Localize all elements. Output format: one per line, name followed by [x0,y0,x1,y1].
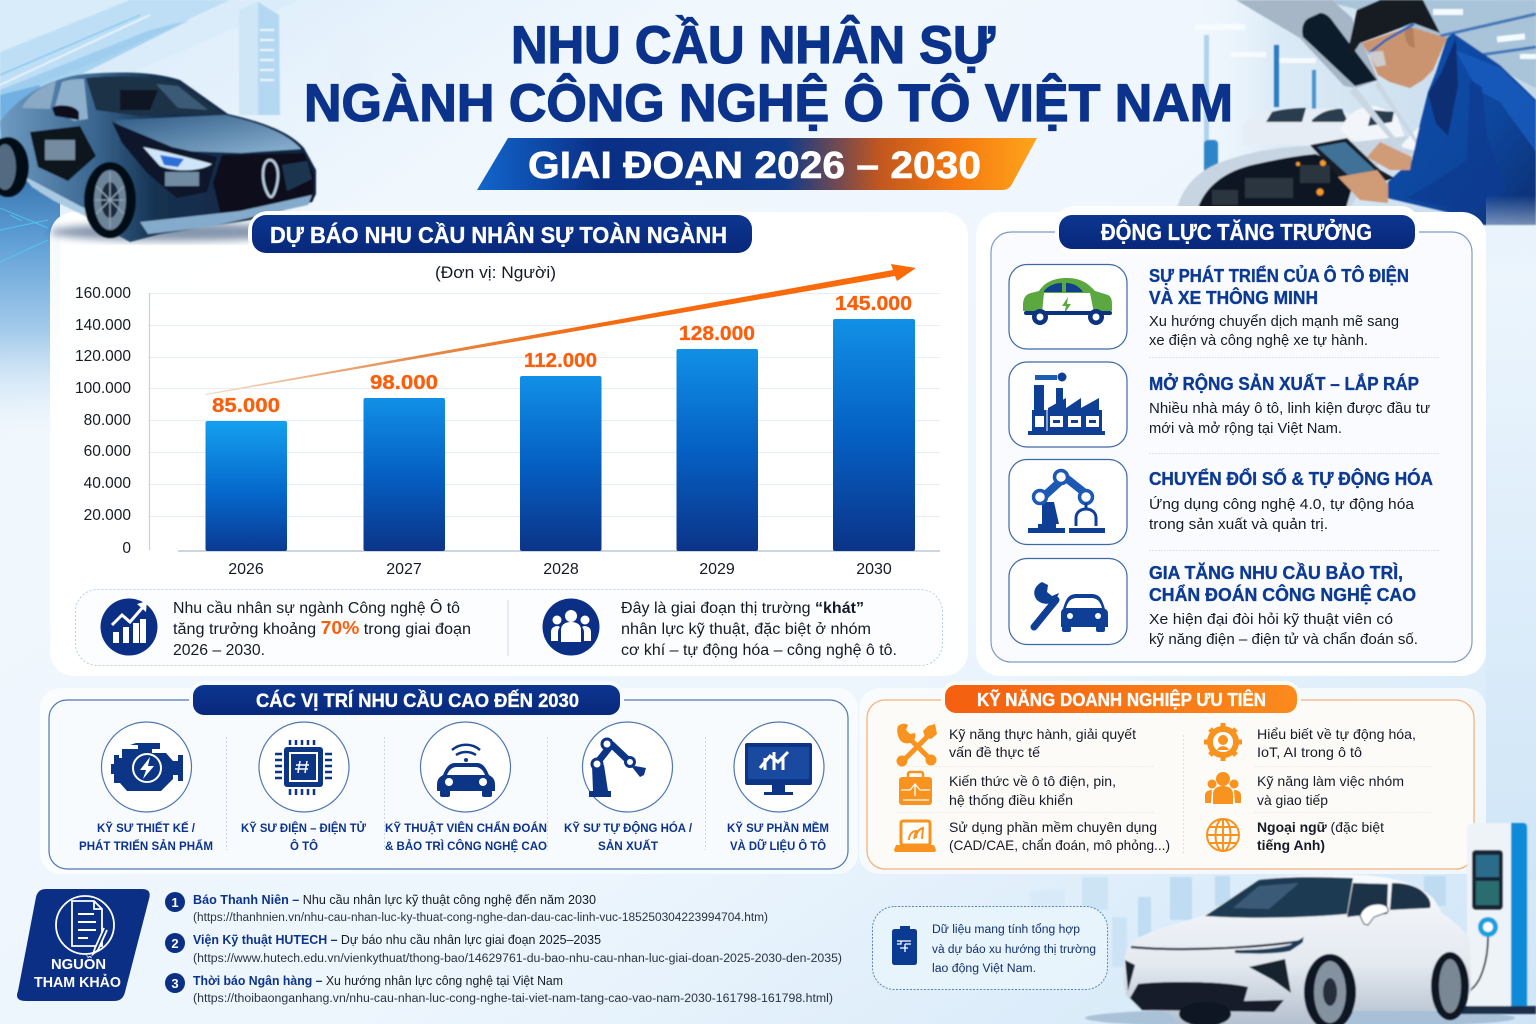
driver 1 text: xe điện và công nghệ xe tự hành. [1149,332,1368,349]
bar chart: 98.000 [370,371,438,394]
trend arrow [205,264,916,395]
reference 1 [165,892,768,924]
driver 1 text [1149,265,1409,349]
background: left speed streaks and tower [0,0,370,430]
skill text: và giao tiếp [1257,792,1328,808]
icon box: electric car [1009,264,1127,349]
icon: team [1205,772,1241,804]
skill text: Ngoại ngữ (đặc biệt [1257,819,1384,835]
position 3 label [385,820,547,853]
bar chart: 2026 [228,561,264,578]
position 3 label: & BẢO TRÌ CÔNG NGHỆ CAO [385,838,547,853]
insight text right: nhân lực kỹ thuật, đặc biệt ở nhóm [621,621,871,638]
image: see-through sedan top left [0,72,316,242]
skill text [949,773,1116,808]
position 2: electrical engineer [241,722,366,853]
bar chart: 140.000 [75,317,131,334]
raised hood [1236,0,1378,88]
icon: chip [259,722,349,812]
note: data disclaimer [872,906,1108,990]
position 3: diagnostic technician [385,722,547,853]
skill text [1257,773,1404,808]
left margin glow [0,160,60,430]
panel: priority skills [859,681,1486,874]
mirror [1360,904,1388,925]
badge: references: THAM KHẢO [34,974,121,991]
heading: skills: KỸ NĂNG DOANH NGHIỆP ƯU TIÊN [977,689,1266,710]
reference 1: Báo Thanh Niên – Nhu cầu nhân lực kỹ thuật công nghệ đến năm 2030 [193,893,596,907]
hair [1348,0,1440,55]
driver 4 text [1149,562,1418,648]
side windows [22,81,56,109]
image: EV charger [1085,823,1536,1024]
insight text right: Đây là giai đoạn thị trường “khát” [621,600,864,617]
reference 1: (https://thanhnien.vn/nhu-cau-nhan-luc-ky-thuat-cong-nghe-dan-dau-cac-linh-vuc-185250304223994704.htm) [193,912,768,924]
title: NGÀNH CÔNG NGHỆ Ô TÔ VIỆT NAM [304,72,1233,133]
insight text left [173,600,471,659]
bar chart: 2029 [699,561,735,578]
skill text: Kỹ năng thực hành, giải quyết [949,726,1136,742]
front lip [140,195,312,234]
driver 3 text: Ứng dụng công nghệ 4.0, tự động hóa [1149,496,1415,513]
bar chart: 2028 [543,561,579,578]
reference 3: 3 [171,976,179,991]
bar chart: 145.000 [835,292,912,315]
driver 2 text: MỞ RỘNG SẢN XUẤT – LẮP RÁP [1149,373,1419,394]
position 2 label: KỸ SƯ ĐIỆN – ĐIỆN TỬ [241,820,366,835]
skill: automation [1204,723,1416,761]
insight text right [621,600,897,659]
bar chart: 128.000 [679,322,755,345]
skill text: Sử dụng phần mềm chuyên dụng [949,819,1157,835]
chart unit: (Đơn vị: Người) [435,263,556,282]
icon: people [542,598,600,656]
icon: growth chart [100,598,158,656]
silhouette [0,72,316,242]
side windows [1347,883,1431,917]
car front and engine [1177,136,1433,208]
uniform [1387,33,1536,225]
ceiling [1320,0,1536,88]
note: data disclaimer: Dữ liệu mang tính tổng hợp [932,924,1080,936]
bar chart: 2027 [386,561,422,578]
reference 2: (https://www.hutech.edu.vn/vienkythuat/thong-bao/14629761-du-bao-nhu-cau-nhan-luc-giai-doan-2025-2030-den-2035) [193,953,842,965]
icon: document [56,896,114,954]
skill text [1257,726,1416,760]
driver 3 text [1149,468,1433,533]
heading: chart panel [248,211,756,257]
bar chart: 60.000 [84,443,131,460]
insight text left: tăng trưởng khoảng 70% trong giai đoạn [173,617,471,638]
bar chart: 112.000 [524,349,597,372]
reference 1: 1 [171,895,179,910]
panel: high-demand positions [40,681,858,874]
banner: period: GIAI ĐOẠN 2026 – 2030 [528,145,981,187]
position 4 label: SẢN XUẤT [598,838,659,853]
position 4 label [564,820,693,853]
position 4: automation engineer [564,722,693,853]
grille badge [263,160,278,197]
wheels [84,162,136,238]
tablet and hands [1310,138,1394,183]
bar chart: 0 [122,540,131,557]
lower intakes [1249,959,1291,993]
position 2 label [241,820,366,853]
driver 1 text: Xu hướng chuyển dịch mạnh mẽ sang [1149,313,1399,330]
position 1 label [79,820,213,853]
icon: gear [1204,723,1242,761]
glasses [1368,24,1414,54]
background: city skyline bottom right [1030,876,1446,967]
skill text: hệ thống điều khiển [949,792,1073,808]
insight text left: 2026 – 2030. [173,642,265,659]
note: data disclaimer: lao động Việt Nam. [932,963,1036,975]
position 1: design engineer [79,722,213,853]
note: data disclaimer: và dự báo xu hướng thị trường [932,944,1096,956]
position 5 label: KỸ SƯ PHẦN MỀM [727,820,829,835]
heading: skills [941,681,1301,717]
icon: engine [102,722,192,812]
windshield [86,76,226,116]
skill: foreign language [1207,819,1384,853]
rear side panels [22,175,112,225]
icon box: robot arm [1009,460,1127,544]
skill: teamwork [1205,772,1404,808]
icon: crossed tools [896,724,937,766]
heading: positions [189,681,624,718]
skill text [949,819,1170,853]
insight strip [76,590,942,666]
image: white electric SUV [1123,874,1471,1024]
skill text [1257,819,1384,853]
engine bay [112,122,217,198]
bar chart: 40.000 [84,475,131,492]
panel: forecast chart [50,212,968,676]
hood [115,115,301,153]
wheels [1304,954,1356,1024]
driver 2 text: Nhiều nhà máy ô tô, linh kiện được đầu tư [1149,400,1430,417]
reference 3 [165,973,833,1005]
skill text: (CAD/CAE, chẩn đoán, mô phỏng...) [949,837,1170,853]
heading: positions: CÁC VỊ TRÍ NHU CẦU CAO ĐẾN 2030 [256,690,579,712]
position 1 label: PHÁT TRIỂN SẢN PHẨM [79,838,213,853]
position 3 label: KỸ THUẬT VIÊN CHẨN ĐOÁN [385,820,547,835]
windshield [1205,877,1353,918]
skill text: Hiểu biết về tự động hóa, [1257,726,1416,742]
insight text left: Nhu cầu nhân sự ngành Công nghệ Ô tô [173,600,460,617]
insight text right: cơ khí – tự động hóa – công nghệ ô tô. [621,642,897,659]
bar chart: 20.000 [84,507,131,524]
banner: period [477,138,1037,190]
skill text: IoT, AI trong ô tô [1257,744,1362,760]
driver 3 text: trong sản xuất và quản trị. [1149,516,1328,533]
background cars [1242,108,1352,145]
reference 2: Viện Kỹ thuật HUTECH – Dự báo nhu cầu nhân lực giai đoạn 2025–2035 [193,933,601,947]
bar chart: 160.000 [75,285,131,302]
icon: laptop [894,821,936,852]
headlight [143,147,212,170]
driver 4 text: Xe hiện đại đòi hỏi kỹ thuật viên có [1149,611,1393,628]
reference 3: (https://thoibaonganhang.vn/nhu-cau-nhan-luc-cong-nghe-tai-viet-nam-tang-cao-vao-nam-2030-161798-161798.html) [193,993,833,1005]
bar chart: 2030 [856,561,892,578]
skill text: vấn đề thực tế [949,744,1040,760]
icon: globe [1207,819,1239,851]
position 4 label: KỸ SƯ TỰ ĐỘNG HÓA / [564,820,693,835]
title: NHU CẦU NHÂN SỰ [511,14,995,75]
skill text: tiếng Anh) [1257,837,1325,853]
position 5 label: VÀ DỮ LIỆU Ô TÔ [730,838,826,853]
driver 1 text: SỰ PHÁT TRIỂN CỦA Ô TÔ ĐIỆN [1149,265,1409,286]
icon box: wrench and car [1009,558,1127,644]
skill: practical [896,724,1136,766]
heading: growth drivers: ĐỘNG LỰC TĂNG TRƯỞNG [1101,217,1372,245]
reference 2: 2 [171,936,179,951]
icon box: factory [1009,362,1127,447]
icon: battery case [899,772,932,805]
heading: chart panel: DỰ BÁO NHU CẦU NHÂN SỰ TOÀN NGÀNH [270,221,727,248]
driver 4 text: GIA TĂNG NHU CẦU BẢO TRÌ, [1149,562,1403,583]
front face [213,153,314,223]
bar chart: 100.000 [75,380,131,397]
driver 4 text: CHẨN ĐOÁN CÔNG NGHỆ CAO [1149,584,1416,605]
bar chart [75,264,940,578]
bar chart: 120.000 [75,348,131,365]
driver 4 text: kỹ năng điện – điện tử và chẩn đoán số. [1149,631,1418,648]
skill text [949,726,1136,760]
skill text: Kiến thức về ô tô điện, pin, [949,773,1116,789]
driver 3 text: CHUYỂN ĐỔI SỐ & TỰ ĐỘNG HÓA [1149,468,1433,489]
bar chart: 80.000 [84,412,131,429]
badge: references: NGUỒN [51,955,106,973]
reference 3: Thời báo Ngân hàng – Xu hướng nhân lực công nghệ tại Việt Nam [193,974,563,988]
reference 2 [165,933,842,965]
title [304,14,1233,133]
headlight line [1131,941,1303,949]
icon: monitor [734,722,824,812]
neck and face [1362,28,1447,88]
skill: software [894,819,1170,853]
driver 2 text: mới và mở rộng tại Việt Nam. [1149,420,1342,437]
icon: clipboard [892,926,917,965]
heading: growth drivers [1055,206,1419,253]
skill text: Kỹ năng làm việc nhóm [1257,773,1404,789]
bar chart: 85.000 [212,394,280,417]
position 1 label: KỸ SƯ THIẾT KẾ / [97,820,196,835]
position 5 label [727,820,829,853]
icon: industrial robot [582,722,672,812]
image: mechanic and car engine [1177,0,1536,270]
position 2 label: Ô TÔ [290,838,318,853]
skill: EV knowledge [899,772,1116,808]
badge: references [17,889,150,1001]
panel: growth drivers [976,212,1486,676]
driver 2 text [1149,373,1430,437]
position 5: software engineer [727,722,829,853]
icon: connected car [420,722,510,812]
driver 1 text: VÀ XE THÔNG MINH [1149,287,1318,308]
